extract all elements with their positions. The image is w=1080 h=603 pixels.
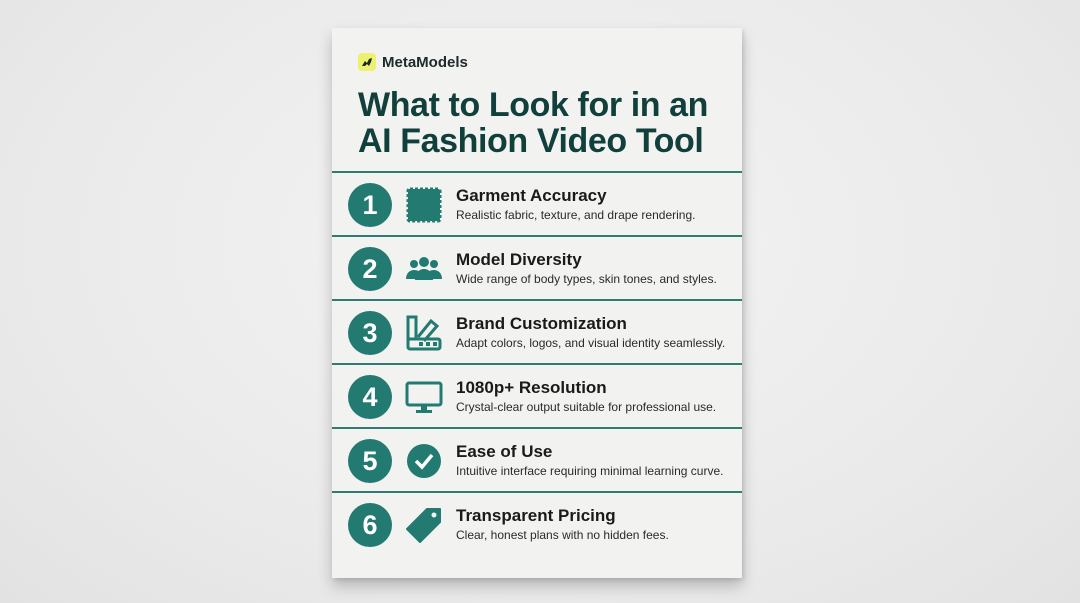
- item 3: Adapt colors, logos, and visual identity seamlessly.: [456, 336, 725, 350]
- item 2: [348, 247, 717, 291]
- item 4: 4: [362, 382, 378, 412]
- item 6: 6: [362, 510, 378, 540]
- icon: palette: [406, 316, 442, 350]
- item 1: 1: [362, 190, 378, 220]
- item 6: [348, 503, 669, 547]
- paper: [332, 28, 742, 578]
- item 2: Model Diversity: [456, 250, 582, 269]
- title: [358, 86, 708, 160]
- item 6: Clear, honest plans with no hidden fees.: [456, 528, 669, 542]
- item 6: Transparent Pricing: [456, 506, 616, 525]
- item 5: [348, 439, 723, 483]
- item 2: Wide range of body types, skin tones, and styles.: [456, 272, 717, 286]
- icon: fabric swatch: [406, 188, 442, 222]
- item 3: [348, 311, 725, 355]
- item 1: Realistic fabric, texture, and drape rendering.: [456, 208, 695, 222]
- logo: MetaModels: [382, 54, 468, 70]
- item 5: 5: [362, 446, 378, 476]
- item 3: Brand Customization: [456, 314, 627, 333]
- item 4: 1080p+ Resolution: [456, 378, 607, 397]
- icon: check: [407, 444, 441, 478]
- item 4: [348, 375, 716, 419]
- item 4: Crystal-clear output suitable for professional use.: [456, 400, 716, 414]
- title: What to Look for in an: [358, 86, 708, 124]
- icon: price tag: [406, 508, 441, 543]
- item 2: 2: [362, 254, 378, 284]
- item 5: Ease of Use: [456, 442, 552, 461]
- item 1: [348, 183, 695, 227]
- item 1: Garment Accuracy: [456, 186, 607, 205]
- icon: people: [406, 257, 442, 280]
- item 3: 3: [362, 318, 378, 348]
- item 5: Intuitive interface requiring minimal learning curve.: [456, 464, 723, 478]
- title: AI Fashion Video Tool: [358, 122, 703, 160]
- icon: monitor: [406, 382, 442, 413]
